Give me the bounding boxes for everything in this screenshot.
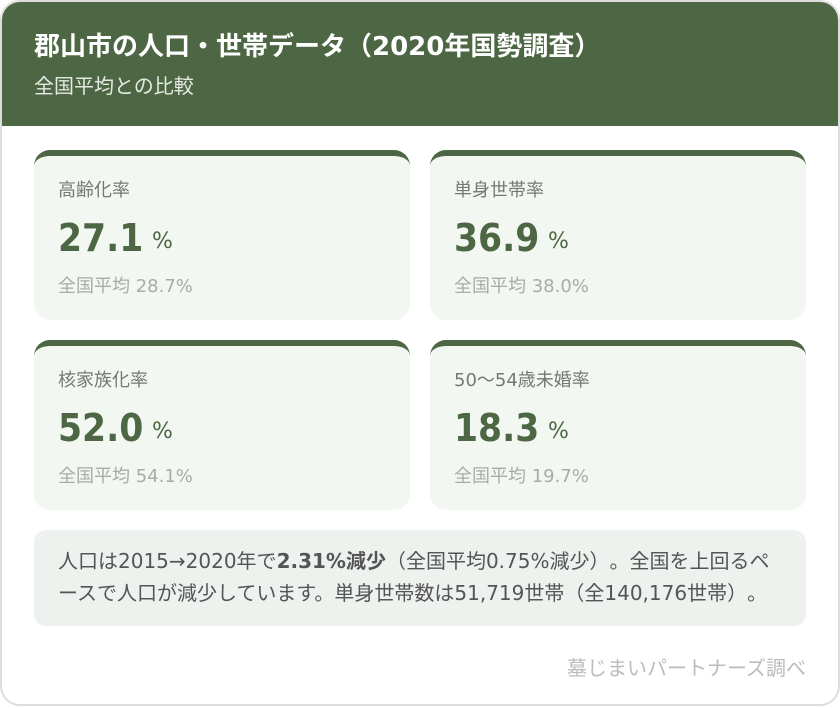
label: 高齢化率 <box>58 180 130 201</box>
panel: single households <box>430 150 806 320</box>
unit: % <box>152 419 173 444</box>
panel: unmarried at 50-54 <box>430 340 806 510</box>
national average: 全国平均 28.7% <box>58 276 193 297</box>
panel: nuclear family <box>34 340 410 510</box>
value: 36.9 <box>454 216 539 260</box>
label: 単身世帯率 <box>454 180 544 201</box>
subtitle: 全国平均との比較 <box>34 74 194 98</box>
value: 52.0 <box>58 406 143 450</box>
unit: % <box>548 419 569 444</box>
value: 18.3 <box>454 406 539 450</box>
unit: % <box>152 229 173 254</box>
label: 50～54歳未婚率 <box>454 370 590 391</box>
value: 27.1 <box>58 216 143 260</box>
note line 2: ースで人口が減少しています。単身世帯数は51,719世帯（全140,176世帯）。 <box>58 581 767 605</box>
national average: 全国平均 54.1% <box>58 466 193 487</box>
panel: aging rate <box>34 150 410 320</box>
title: 郡山市の人口・世帯データ（2020年国勢調査） <box>34 32 600 62</box>
unit: % <box>548 229 569 254</box>
note line 1: 人口は2015→2020年で2.31%減少（全国平均0.75%減少）。全国を上回るペ <box>58 549 770 573</box>
header band <box>2 2 838 126</box>
national average: 全国平均 38.0% <box>454 276 589 297</box>
national average: 全国平均 19.7% <box>454 466 589 487</box>
label: 核家族化率 <box>58 370 148 391</box>
footer credit: 墓じまいパートナーズ調べ <box>567 656 806 680</box>
callout: summary note <box>34 530 806 626</box>
